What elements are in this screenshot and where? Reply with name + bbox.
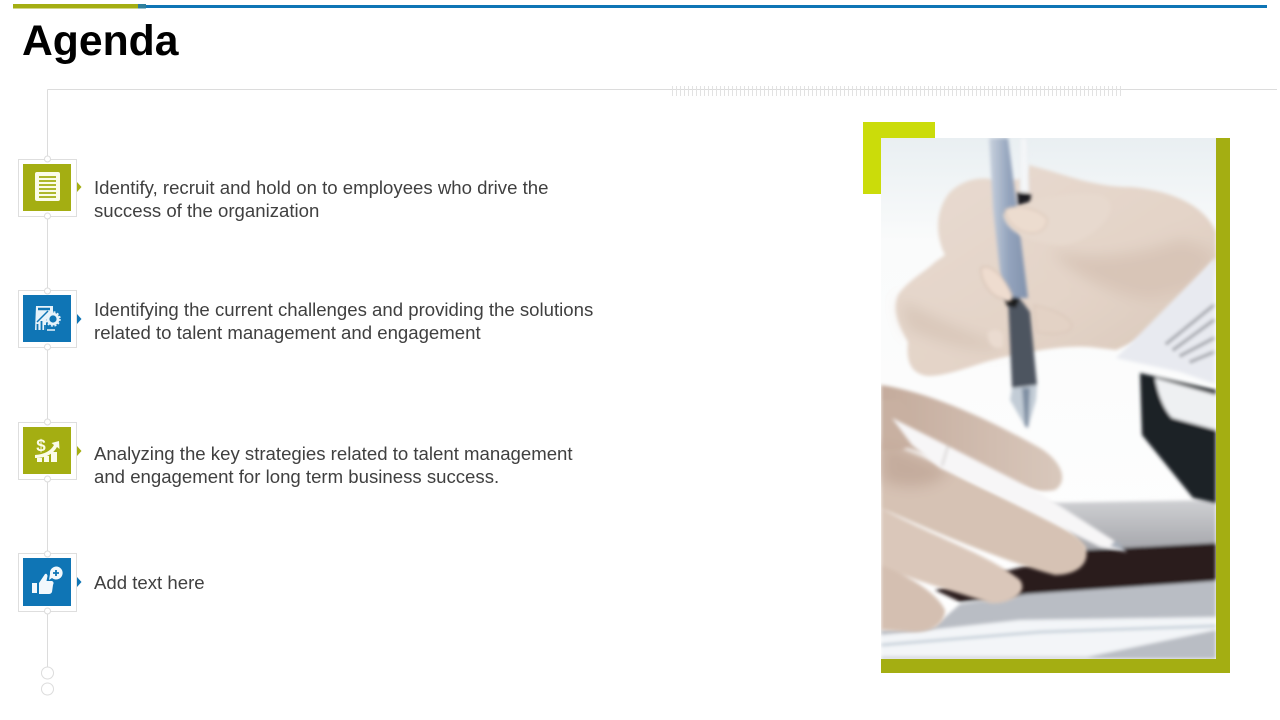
text: item 1: Identify, recruit and hold on to employees who drive the bbox=[94, 177, 548, 198]
upper hand bbox=[896, 165, 1216, 376]
text: item 2 bbox=[94, 299, 593, 343]
lower hand bbox=[881, 385, 1087, 632]
text: item 2: Identifying the current challenges and providing the solutions bbox=[94, 299, 593, 320]
title: Agenda bbox=[22, 17, 178, 65]
icon: report with gear bbox=[18, 288, 82, 350]
text: item 1 bbox=[94, 177, 548, 221]
icon: thumbs up with plus bbox=[18, 550, 82, 614]
ballpoint pen bbox=[989, 138, 1037, 428]
text: item 2: related to talent management and engagement bbox=[94, 322, 481, 343]
white pen bbox=[892, 418, 1127, 552]
shirt cuff and sleeve bbox=[1116, 258, 1216, 503]
text: item 1: success of the organization bbox=[94, 200, 319, 221]
fingers over pen bbox=[985, 199, 1034, 347]
icon: dollar growth chart: $ bbox=[36, 436, 46, 455]
text: item 4: Add text here bbox=[94, 572, 205, 593]
icon: document list bbox=[18, 156, 82, 220]
text: item 3: and engagement for long term business success. bbox=[94, 466, 499, 487]
table bbox=[881, 500, 1216, 659]
icon: dollar growth chart bbox=[18, 418, 82, 482]
accent frame bbox=[863, 122, 1230, 673]
top accent rule bbox=[13, 4, 1267, 8]
text: item 3 bbox=[94, 443, 573, 487]
text: item 3: Analyzing the key strategies related to talent management bbox=[94, 443, 573, 464]
photo: hands holding pens, with accent frame bbox=[863, 122, 1230, 673]
